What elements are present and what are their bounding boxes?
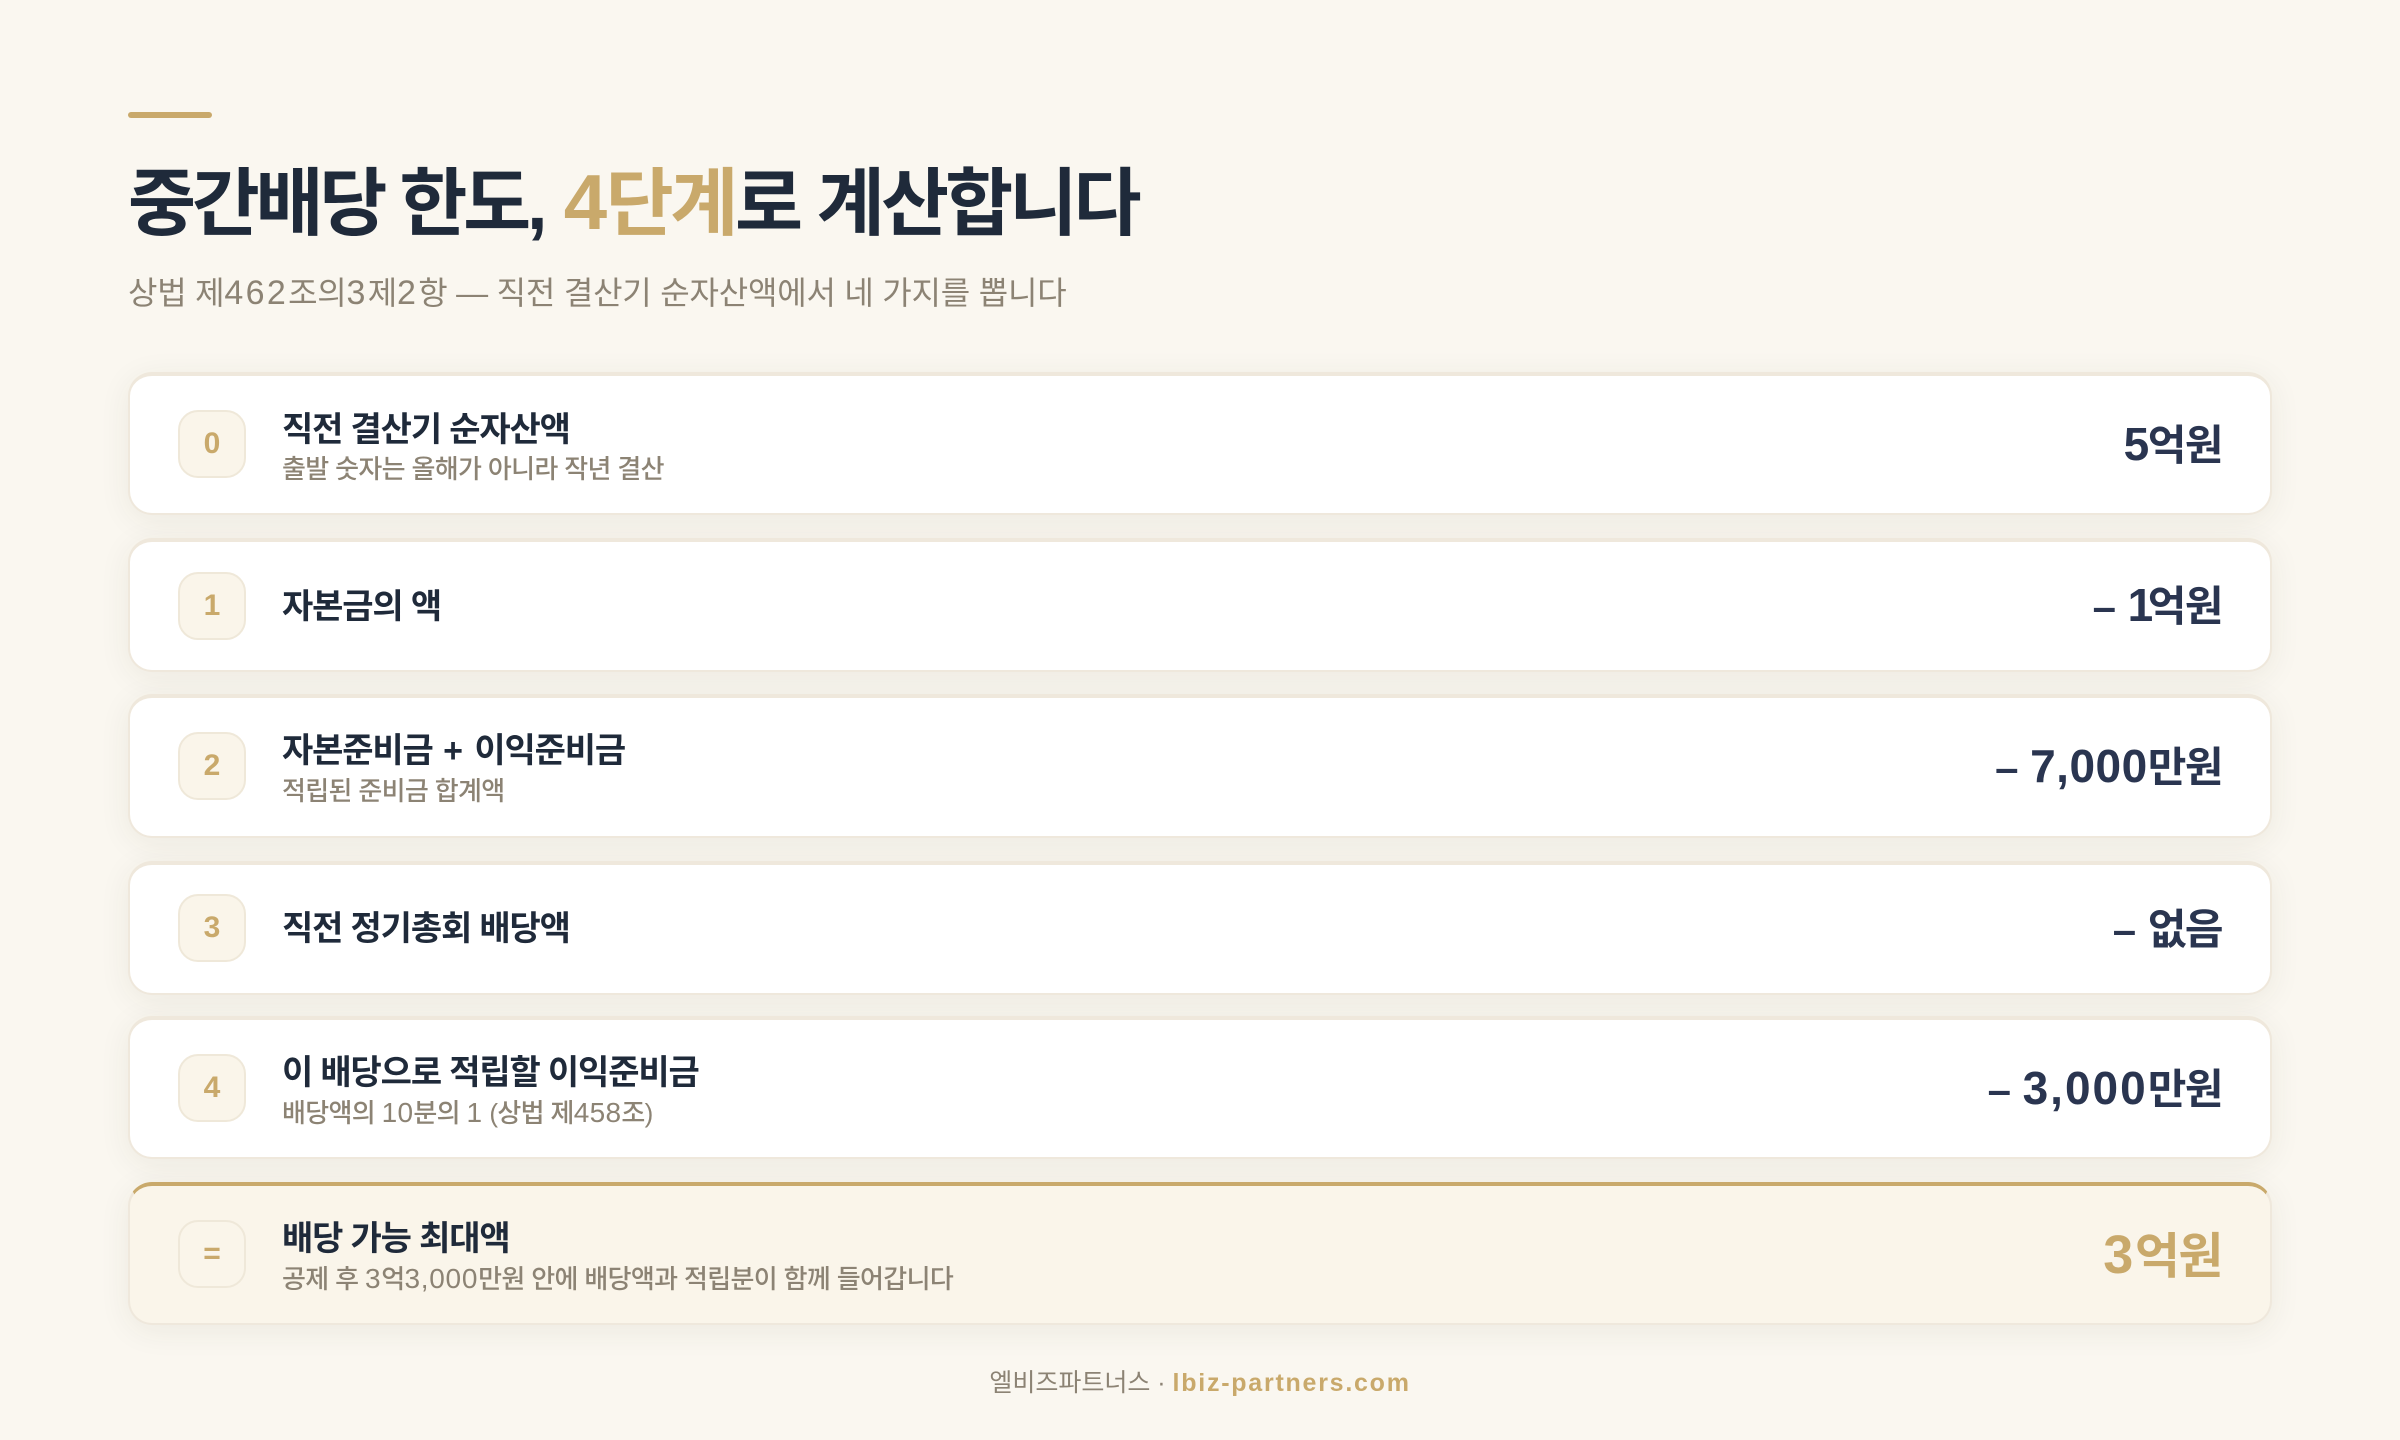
title: 중간배당 한도, 4단계로 계산합니다 [128,158,1138,246]
total value: 3억원 [2103,1225,2222,1285]
step 4 value: – 3,000만원 [1988,1062,2222,1114]
badge: 3: 3 [204,911,220,944]
badge: 3 [178,894,246,962]
total note: 공제 후 3억3,000만원 안에 배당액과 적립분이 함께 들어갑니다 [282,1263,953,1294]
badge: 4: 4 [204,1071,220,1104]
step 0 value: 5억원 [2124,418,2222,470]
badge: 2 [178,732,246,800]
step 4 label: 이 배당으로 적립할 이익준비금 [282,1054,699,1092]
panel: step 0 [128,372,2272,515]
step 2 value: – 7,000만원 [1995,740,2222,792]
panel: step 3 [128,861,2272,995]
panel: step 1 [128,538,2272,672]
badge: 0 [178,410,246,478]
panel: total [128,1182,2272,1325]
step 0 note: 출발 숫자는 올해가 아니라 작년 결산 [282,454,664,484]
step 3 label: 직전 정기총회 배당액 [282,910,570,948]
subtitle: 상법 제462조의3제2항 — 직전 결산기 순자산액에서 네 가지를 뽑니다 [128,274,1066,312]
badge: 0: 0 [204,427,220,460]
badge: equals: = [203,1237,221,1270]
step 3 value: – 없음 [2113,906,2222,953]
step 1 value: – 1억원 [2093,579,2222,631]
badge: 1: 1 [204,589,220,622]
step 4 note: 배당액의 10분의 1 (상법 제458조) [282,1097,653,1128]
step 0 label: 직전 결산기 순자산액 [282,411,570,449]
badge: equals [178,1220,246,1288]
panel: step 4 [128,1016,2272,1159]
footer: 엘비즈파트너스 · lbiz-partners.com [989,1369,1411,1397]
badge: 4 [178,1054,246,1122]
panel: step 2 [128,694,2272,838]
step 2 label: 자본준비금 + 이익준비금 [282,732,625,770]
total label: 배당 가능 최대액 [282,1220,510,1258]
badge: 2: 2 [204,749,220,782]
step 1 label: 자본금의 액 [282,588,441,626]
accent bar [128,112,212,118]
badge: 1 [178,572,246,640]
step 2 note: 적립된 준비금 합계액 [282,776,505,806]
